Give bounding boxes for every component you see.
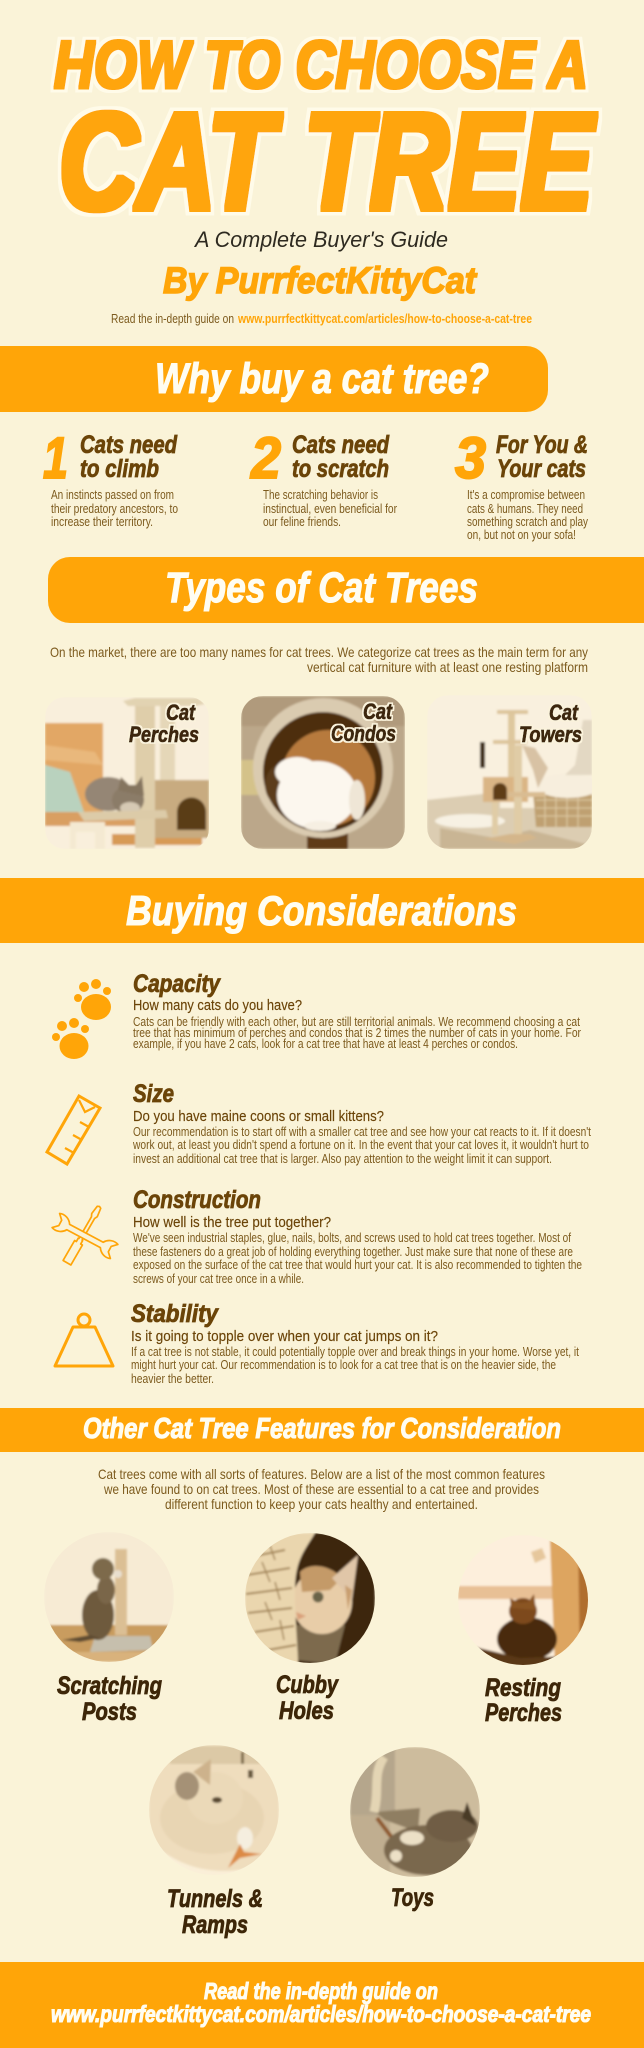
panel: cat condos photo xyxy=(241,696,405,849)
reason 1 text: increase their territory. xyxy=(51,515,153,529)
features intro text: we have found to on cat trees. Most of these are essential to a cat tree and provides xyxy=(103,1481,539,1497)
label: cat perches: Cat xyxy=(166,700,196,725)
size text xyxy=(132,1125,591,1166)
icon: wrench and screwdriver xyxy=(52,1204,118,1265)
title block xyxy=(54,27,596,326)
icon: paw prints xyxy=(52,979,111,1059)
label: scratching posts: Scratching xyxy=(57,1672,162,1700)
panel: cat towers photo xyxy=(427,704,592,849)
label: resting perches: Perches xyxy=(485,1699,562,1727)
panel: types of cat trees heading xyxy=(48,557,644,623)
label: cat towers: Cat xyxy=(549,700,579,725)
features intro text: Cat trees come with all sorts of features. Below are a list of the most common features xyxy=(98,1466,545,1482)
label: tunnels and ramps: Ramps xyxy=(182,1911,248,1939)
size text: invest an additional cat tree that is larger. Also pay attention to the weight limit it can support. xyxy=(133,1152,552,1166)
reason 1 text: their predatory ancestors, to xyxy=(51,502,178,516)
number 1: 1 xyxy=(43,426,68,491)
stability text xyxy=(131,1345,579,1386)
guide link line: Read the in-depth guide on xyxy=(111,311,234,326)
construction question: How well is the tree put together? xyxy=(133,1214,331,1231)
panel: size xyxy=(47,1080,591,1166)
panel: buying considerations heading xyxy=(0,878,644,943)
reason 1 heading xyxy=(80,431,178,483)
panel: why buy a cat tree heading xyxy=(0,346,548,412)
label: cat perches xyxy=(129,700,199,747)
panel: other features heading xyxy=(0,1408,644,1452)
photo: scratching post xyxy=(50,1547,168,1662)
reason 2 text: The scratching behavior is xyxy=(263,488,378,502)
panel: reason 3 xyxy=(455,426,589,542)
panel: buying considerations heading: Buying Considerations xyxy=(126,887,517,934)
feature: tunnels and ramps xyxy=(149,1745,279,1939)
number 2: 2 xyxy=(250,426,281,491)
photo: kitten with toy xyxy=(350,1747,480,1877)
footer banner xyxy=(0,1962,644,2048)
guide link line xyxy=(111,311,532,326)
panel: capacity xyxy=(52,970,581,1059)
label: cubby holes: Cubby xyxy=(276,1671,339,1699)
feature: resting perches xyxy=(458,1535,590,1727)
capacity question: How many cats do you have? xyxy=(133,997,302,1014)
stability text: might hurt your cat. Our recommendation is to look for a cat tree that is on the heavier side, the xyxy=(131,1358,556,1372)
reason 1 heading: to climb xyxy=(80,455,159,483)
features intro text: different function to keep your cats healthy and entertained. xyxy=(165,1496,478,1512)
label: cat towers xyxy=(519,700,582,747)
feature: scratching posts xyxy=(50,1547,168,1720)
reason 3 text: cats & humans. They need xyxy=(467,502,583,516)
capacity heading: Capacity xyxy=(133,970,221,998)
panel: reason 1 xyxy=(43,426,178,529)
stability heading: Stability xyxy=(131,1300,219,1328)
photo: kitten in basket xyxy=(245,1533,375,1664)
capacity text xyxy=(133,1015,581,1051)
reason 2 text xyxy=(263,488,397,529)
size heading: Size xyxy=(133,1080,174,1108)
label: cat condos xyxy=(331,699,396,746)
size question: Do you have maine coons or small kittens? xyxy=(133,1108,384,1125)
label: tunnels and ramps xyxy=(167,1885,263,1939)
reason 3 text: on, but not on your sofa! xyxy=(467,528,576,542)
label: cat condos: Condos xyxy=(331,721,396,746)
types intro text xyxy=(50,644,588,675)
byline: By PurrfectKittyCat xyxy=(163,260,478,301)
construction heading: Construction xyxy=(133,1186,261,1214)
reason 2 heading: Cats need xyxy=(292,431,390,459)
reason 1 text xyxy=(51,488,178,529)
panel: reason 2 xyxy=(250,426,397,529)
label: cat perches: Perches xyxy=(129,722,199,747)
types intro text: vertical cat furniture with at least one resting platform xyxy=(307,659,588,675)
panel: stability xyxy=(55,1300,579,1386)
reason 2 text: our feline friends. xyxy=(263,515,341,529)
panel: types of cat trees heading: Types of Cat Trees xyxy=(165,564,478,612)
footer line 1: Read the in-depth guide on xyxy=(204,1978,438,2004)
label: resting perches: Resting xyxy=(485,1674,561,1702)
reason 3 heading xyxy=(496,431,588,483)
reason 1 text: An instincts passed on from xyxy=(51,488,174,502)
construction text: screws of your cat tree once in a while. xyxy=(133,1272,304,1286)
stability question: Is it going to topple over when your cat jumps on it? xyxy=(131,1328,438,1345)
reason 2 text: instinctual, even beneficial for xyxy=(263,502,397,516)
feature: cubby holes xyxy=(245,1533,375,1725)
number 3: 3 xyxy=(455,426,486,491)
reason 3 text: something scratch and play xyxy=(467,515,589,529)
label: resting perches xyxy=(485,1674,562,1727)
reason 2 heading: to scratch xyxy=(292,455,389,483)
construction text xyxy=(133,1231,582,1286)
panel: construction xyxy=(52,1186,582,1286)
panel: cat perches photo xyxy=(45,697,209,849)
reason 1 heading: Cats need xyxy=(80,431,178,459)
reason 3 heading: Your cats xyxy=(497,455,586,483)
reason 3 text: It's a compromise between xyxy=(467,488,585,502)
label: scratching posts xyxy=(57,1672,162,1726)
label: tunnels and ramps: Tunnels & xyxy=(167,1885,263,1913)
stability text: heavier the better. xyxy=(131,1372,214,1386)
subtitle: A Complete Buyer's Guide xyxy=(193,227,448,252)
photo: cat at window xyxy=(458,1535,590,1670)
reason 2 heading xyxy=(292,431,390,483)
guide link line: www.purrfectkittycat.com/articles/how-to-choose-a-cat-tree xyxy=(237,311,532,326)
label: cubby holes: Holes xyxy=(279,1697,334,1725)
features intro text xyxy=(98,1466,545,1512)
label: scratching posts: Posts xyxy=(82,1698,137,1726)
capacity text: example, if you have 2 cats, look for a cat tree that have at least 4 perches or condos. xyxy=(133,1037,518,1051)
label: cat condos: Cat xyxy=(363,699,393,724)
feature: toys xyxy=(350,1747,480,1912)
label: cubby holes xyxy=(276,1671,339,1725)
reason 3 text xyxy=(467,488,589,542)
label: cat towers: Towers xyxy=(519,722,582,747)
label: toys: Toys xyxy=(391,1884,434,1912)
photo: kitten in tunnel xyxy=(149,1745,279,1885)
panel: why buy a cat tree heading: Why buy a cat tree? xyxy=(155,355,489,403)
icon: ruler xyxy=(47,1096,100,1164)
icon: weight xyxy=(55,1314,113,1366)
reason 3 heading: For You & xyxy=(496,431,588,459)
